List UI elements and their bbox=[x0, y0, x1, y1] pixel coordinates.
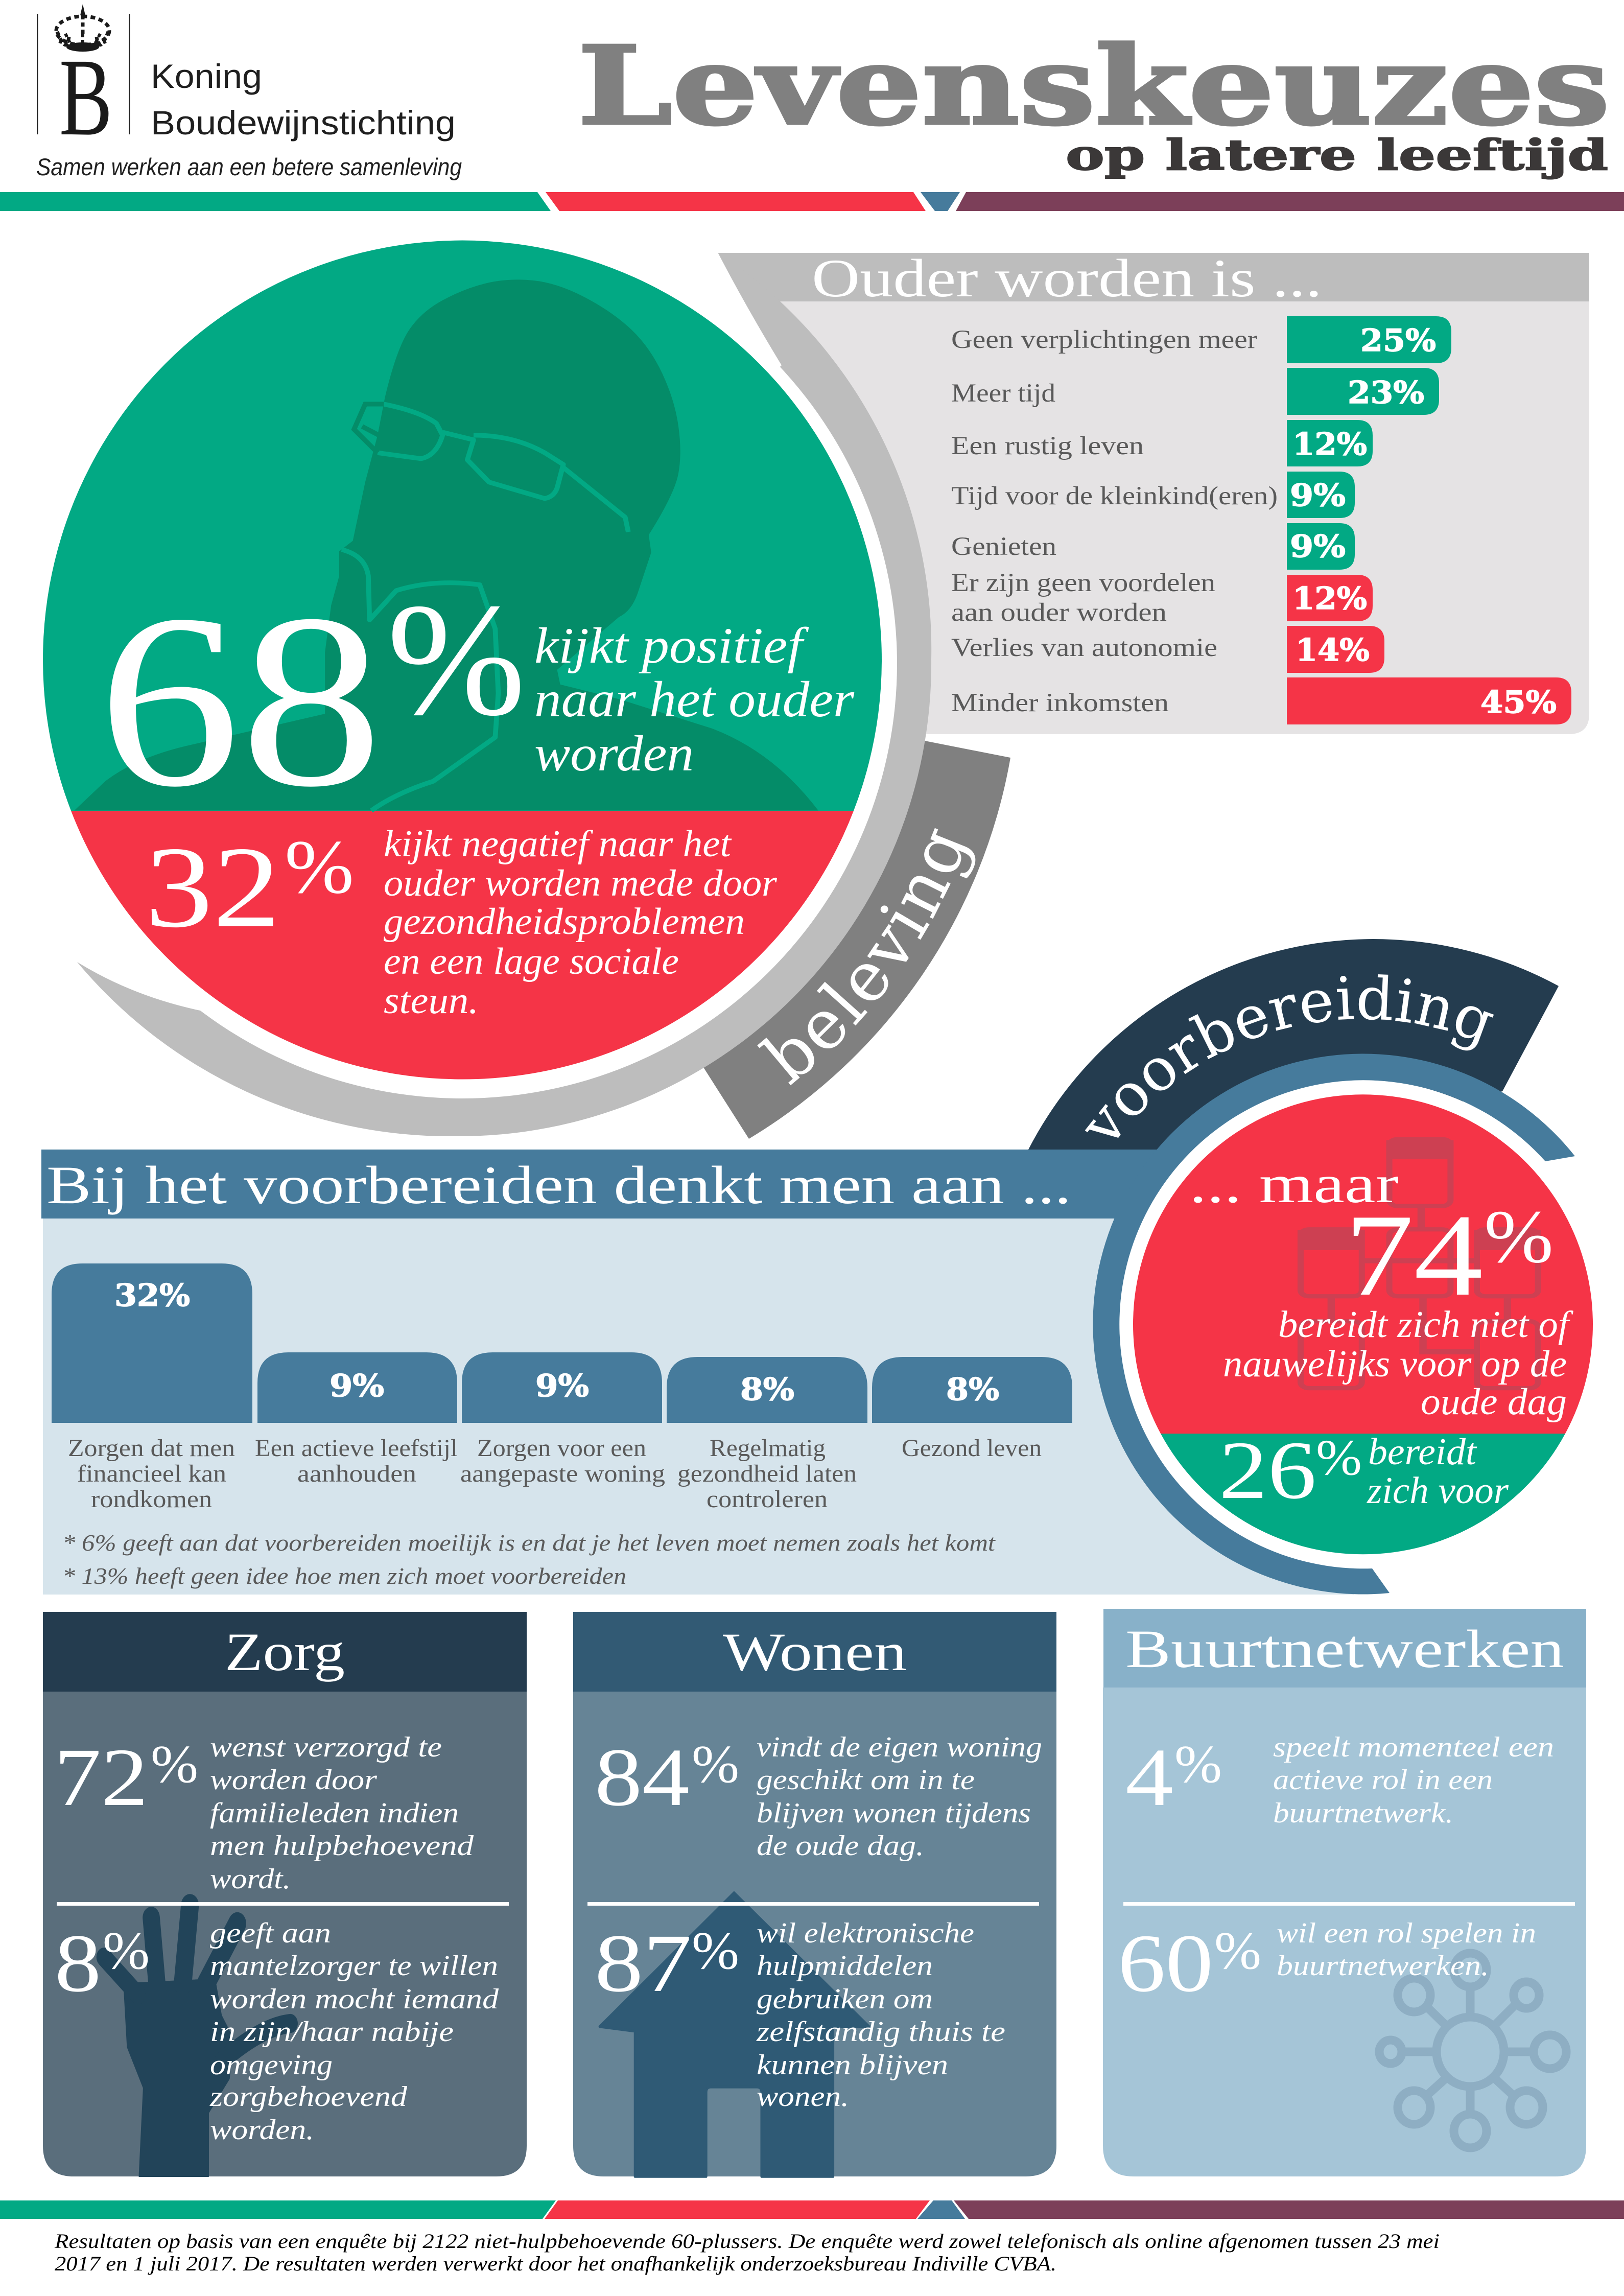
text: kijkt positief: kijkt positief bbox=[534, 617, 809, 674]
panel: wonen: % bbox=[692, 1734, 739, 1794]
stat 8%: 8 bbox=[55, 1918, 101, 2009]
text: kijkt negatief: ouder worden mede door bbox=[384, 862, 778, 904]
panel: main circle belevenis: % bbox=[285, 825, 354, 909]
text: geeft aan mantelzorger: mantelzorger te willen bbox=[210, 1950, 498, 1982]
text: speelt momenteel een: speelt momenteel een bbox=[1273, 1731, 1554, 1763]
panel: zorg: % bbox=[103, 1920, 150, 1980]
text: geeft aan mantelzorger: zorgbehoevend bbox=[209, 2081, 408, 2113]
text: geeft aan mantelzorger: geeft aan bbox=[210, 1917, 331, 1949]
column chart: 9% bbox=[535, 1368, 589, 1404]
panel: main circle belevenis bbox=[43, 241, 882, 1080]
horizontal bar chart: 9% bbox=[1290, 529, 1346, 565]
footnotes: * 13% heeft geen idee hoe men zich moet voorbereiden bbox=[62, 1563, 626, 1589]
text: wil een rol spelen: wil een rol spelen in bbox=[1277, 1917, 1536, 1949]
text: geeft aan mantelzorger: omgeving bbox=[210, 2049, 333, 2081]
panel heading: Bij het voorbereiden denkt men aan ... bbox=[46, 1155, 1071, 1215]
panel: zorg: % bbox=[151, 1734, 198, 1794]
text: wenst verzorgd te: wenst verzorgd te bbox=[210, 1731, 442, 1763]
stat 60%: 60 bbox=[1118, 1918, 1213, 2009]
bar labels: Minder inkomsten bbox=[951, 689, 1169, 717]
panel: voorbereiding circle bbox=[1133, 1094, 1593, 1554]
text: kijkt positief: naar het ouder bbox=[534, 671, 855, 728]
icon: house bbox=[600, 1893, 869, 2176]
bar labels: Tijd voor de kleinkind(eren) bbox=[951, 482, 1278, 510]
column chart: 32% bbox=[114, 1278, 190, 1314]
panel heading: Wonen bbox=[723, 1622, 907, 1682]
text: wil elektronische: hulpmiddelen bbox=[757, 1950, 933, 1982]
bar labels: Geen verplichtingen meer bbox=[951, 325, 1257, 354]
column labels: controleren bbox=[707, 1486, 828, 1513]
horizontal bar chart: 45% bbox=[1480, 685, 1557, 720]
stat 84%: 84 bbox=[595, 1732, 690, 1823]
stat 68%: 68 bbox=[98, 564, 383, 838]
icon: network bbox=[1379, 1953, 1566, 2148]
banner label: beleving bbox=[757, 828, 976, 1085]
text: vindt de eigen woning: geschikt om in te bbox=[757, 1764, 975, 1796]
panel: buurtnetwerken: % bbox=[1214, 1920, 1261, 1980]
text: wil een rol spelen bbox=[1277, 1917, 1536, 1982]
column chart: 9% bbox=[329, 1368, 384, 1404]
subtitle: op latere leeftijd bbox=[1066, 131, 1608, 180]
bar labels: aan ouder worden bbox=[951, 598, 1167, 627]
text: kijkt negatief: steun. bbox=[384, 980, 479, 1022]
horizontal bar chart: 14% bbox=[1296, 632, 1370, 668]
panel: zorg bbox=[43, 1612, 527, 2176]
panel: buurtnetwerken: % bbox=[1174, 1734, 1222, 1794]
stat 87%: 87 bbox=[595, 1918, 692, 2009]
text: wil elektronische bbox=[756, 1917, 1005, 2113]
text: wenst verzorgd te bbox=[210, 1731, 474, 1895]
text: wenst verzorgd te: familieleden indien bbox=[210, 1797, 459, 1829]
panel heading: Zorg bbox=[225, 1622, 345, 1682]
text: bereidt zich voor: zich voor bbox=[1367, 1470, 1509, 1512]
column labels bbox=[68, 1435, 1042, 1513]
panel: bij het voorbereiden bbox=[41, 1150, 1354, 1595]
panel: ouder worden is bbox=[718, 248, 1589, 734]
footer source note: Resultaten op basis van een enquête bij 2122 niet-hulpbehoevende 60-plussers. De enquête werd zowel telefonisch als online afgenomen tussen 23 mei bbox=[54, 2230, 1440, 2253]
column chart: 8% bbox=[946, 1372, 999, 1408]
bar labels: Een rustig leven bbox=[951, 432, 1144, 460]
panel: voorbereiding circle: % bbox=[1316, 1429, 1362, 1486]
text: wenst verzorgd te: worden door bbox=[210, 1764, 377, 1796]
text: wil elektronische: zelfstandig thuis te bbox=[756, 2016, 1005, 2048]
panel: voorbereiding circle: % bbox=[1484, 1195, 1554, 1279]
footnotes: * 6% geeft aan dat voorbereiden moeilijk is en dat je het leven moet nemen zoals het komt bbox=[62, 1530, 996, 1556]
text: bereidt zich niet: bereidt zich niet of bbox=[1278, 1304, 1574, 1346]
logo name line 1: Koning bbox=[151, 57, 262, 95]
banner: beleving bbox=[704, 741, 1010, 1139]
text: bereidt zich niet bbox=[1223, 1304, 1574, 1423]
text: bereidt zich voor bbox=[1367, 1431, 1509, 1512]
text: bereidt zich niet: oude dag bbox=[1421, 1381, 1567, 1423]
horizontal bar chart: 25% bbox=[1360, 323, 1436, 359]
column labels: aangepaste woning bbox=[460, 1460, 665, 1487]
panel: buurtnetwerken bbox=[1103, 1609, 1586, 2176]
footnotes bbox=[62, 1530, 996, 1589]
text: vindt de eigen woning: blijven wonen tijdens bbox=[757, 1797, 1031, 1829]
banner label: voorbereiding bbox=[1085, 974, 1494, 1138]
horizontal bar chart bbox=[1287, 316, 1571, 724]
text: kijkt negatief: en een lage sociale bbox=[384, 941, 679, 982]
text: wil elektronische: wil elektronische bbox=[757, 1917, 974, 1949]
horizontal bar chart: 12% bbox=[1292, 427, 1367, 462]
text: geeft aan mantelzorger: worden mocht iemand bbox=[210, 1983, 499, 2015]
text: wenst verzorgd te: men hulpbehoevend bbox=[210, 1830, 474, 1862]
bar labels: Verlies van autonomie bbox=[951, 634, 1217, 662]
column labels: Zorgen dat men bbox=[68, 1435, 235, 1462]
panel: wonen: % bbox=[692, 1920, 739, 1980]
text: vindt de eigen woning: de oude dag. bbox=[757, 1830, 924, 1862]
text: kijkt positief bbox=[534, 617, 855, 782]
stat 72%: 72 bbox=[54, 1732, 148, 1823]
text: speelt momenteel een: actieve rol in een bbox=[1273, 1764, 1493, 1796]
text: bereidt zich voor: bereidt bbox=[1368, 1431, 1477, 1473]
text: speelt momenteel een: buurtnetwerk. bbox=[1273, 1797, 1453, 1829]
column labels: Gezond leven bbox=[902, 1435, 1042, 1462]
logo name line 2: Boudewijnstichting bbox=[151, 104, 456, 142]
title: Levenskeuzes bbox=[578, 22, 1610, 149]
text: kijkt positief: worden bbox=[534, 725, 694, 782]
footer source note: 2017 en 1 juli 2017. De resultaten werden verwerkt door het onafhankelijk onderzoeksbureau Indiville CVBA. bbox=[55, 2252, 1056, 2275]
text: wil elektronische: wonen. bbox=[757, 2081, 849, 2113]
text: bereidt zich niet: nauwelijks voor op de bbox=[1223, 1343, 1567, 1385]
column labels: Zorgen voor een bbox=[477, 1435, 646, 1462]
panel heading: Ouder worden is ... bbox=[812, 248, 1322, 308]
bar labels: Er zijn geen voordelen bbox=[951, 569, 1215, 597]
text: kijkt negatief: gezondheidsproblemen bbox=[384, 901, 745, 943]
bar labels: Genieten bbox=[951, 532, 1056, 561]
bottom colour stripe bbox=[0, 2200, 1624, 2219]
column labels: gezondheid laten bbox=[677, 1460, 857, 1487]
column chart bbox=[52, 1263, 1072, 1423]
stat 32%: 32 bbox=[145, 823, 280, 952]
text: vindt de eigen woning: vindt de eigen woning bbox=[757, 1731, 1042, 1763]
panel heading: Buurtnetwerken bbox=[1125, 1619, 1564, 1679]
logo tagline: Samen werken aan een betere samenleving bbox=[36, 153, 462, 180]
horizontal bar chart: 23% bbox=[1348, 375, 1424, 411]
horizontal bar chart: 9% bbox=[1290, 478, 1346, 513]
logo letter B: B bbox=[59, 36, 112, 158]
text: vindt de eigen woning bbox=[757, 1731, 1042, 1862]
column labels: aanhouden bbox=[297, 1460, 416, 1487]
banner: voorbereiding bbox=[1028, 939, 1559, 1150]
text: wil een rol spelen: buurtnetwerken. bbox=[1277, 1950, 1489, 1982]
stat 26%: 26 bbox=[1219, 1425, 1316, 1516]
text: ... maar: ... maar bbox=[1189, 1154, 1399, 1214]
icon: crown bbox=[56, 4, 109, 52]
blue ring around voorbereiding circle bbox=[1119, 1080, 1607, 1568]
column chart: 8% bbox=[740, 1372, 794, 1408]
text: geeft aan mantelzorger: worden. bbox=[210, 2114, 314, 2146]
icon: organisation chart bbox=[1301, 1139, 1538, 1388]
column labels: rondkomen bbox=[91, 1486, 212, 1513]
panel: wonen bbox=[573, 1612, 1056, 2176]
stat 4%: 4 bbox=[1125, 1732, 1173, 1823]
panel: main circle belevenis: % bbox=[387, 570, 526, 749]
text: geeft aan mantelzorger bbox=[209, 1917, 499, 2146]
top colour stripe bbox=[0, 192, 1624, 211]
text: kijkt negatief: kijkt negatief naar het bbox=[384, 823, 733, 865]
column labels: financieel kan bbox=[77, 1460, 226, 1487]
column labels: Regelmatig bbox=[710, 1435, 826, 1462]
bar labels bbox=[951, 325, 1278, 717]
stat 74%: 74 bbox=[1345, 1190, 1483, 1320]
text: kijkt negatief bbox=[384, 823, 778, 1022]
grey ring around main circle bbox=[77, 252, 931, 1136]
text: geeft aan mantelzorger: in zijn/haar nabije bbox=[210, 2016, 454, 2048]
icon: man silhouette with glasses bbox=[74, 279, 818, 811]
icon: hand bbox=[104, 1905, 290, 2176]
text: wil elektronische: gebruiken om bbox=[757, 1983, 933, 2015]
text: speelt momenteel een bbox=[1273, 1731, 1554, 1829]
horizontal bar chart: 12% bbox=[1292, 581, 1367, 617]
logo: Koning Boudewijnstichting bbox=[36, 4, 462, 180]
bar labels: Meer tijd bbox=[951, 379, 1055, 408]
text: wil elektronische: kunnen blijven bbox=[757, 2049, 948, 2081]
footer source note bbox=[54, 2230, 1440, 2275]
text: wenst verzorgd te: wordt. bbox=[210, 1863, 291, 1895]
column labels: Een actieve leefstijl bbox=[255, 1435, 458, 1462]
